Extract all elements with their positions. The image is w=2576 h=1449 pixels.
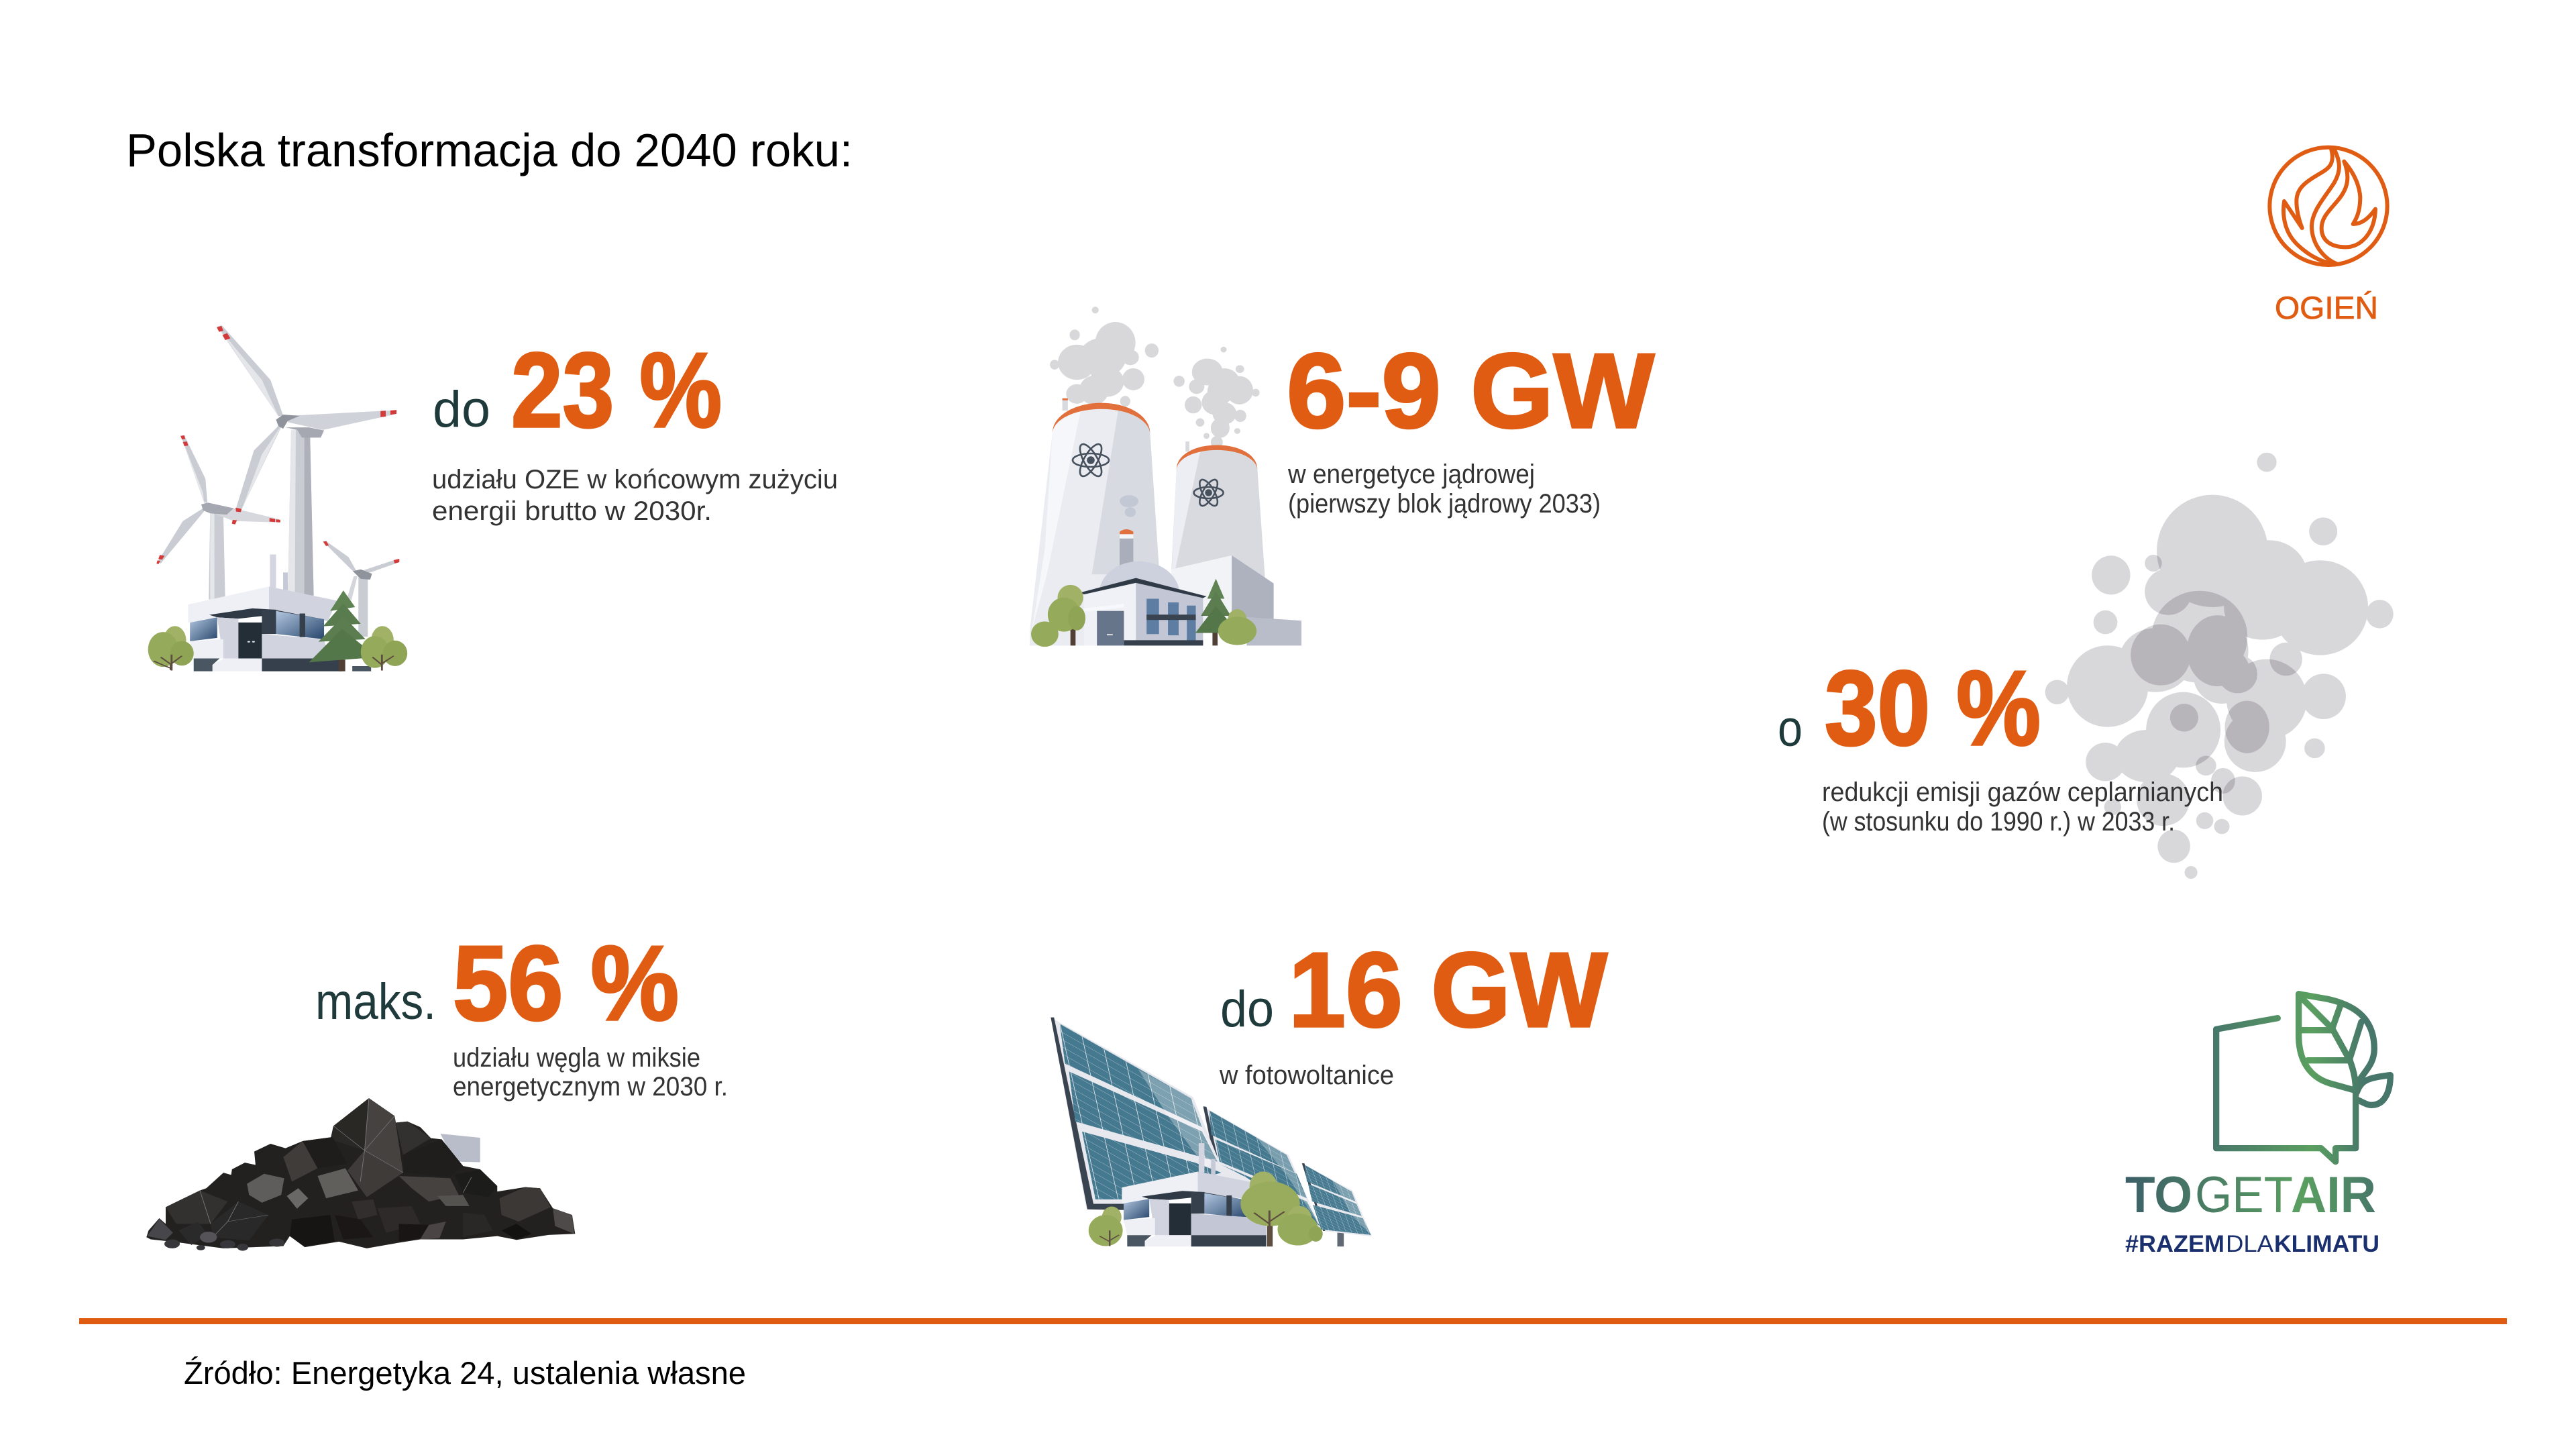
logo: TogetAir: AIR [2291,1167,2376,1224]
logo: TogetAir: DLA [2226,1231,2274,1257]
stat: 30% emissions: (w stosunku do 1990 r.) w 2033 r. [1822,807,2175,837]
solar building [1122,1143,1267,1246]
right bush [352,626,407,672]
stat: 30% emissions: o [1778,700,1803,757]
stat: 6-9 GW: (pierwszy blok jądrowy 2033) [1288,489,1601,519]
dome [1098,561,1181,599]
left turbine [156,435,280,599]
stat: 56% coal: udziału węgla w miksie [453,1043,700,1073]
lower cloud layer [2045,555,2346,879]
logo: TogetAir [2125,994,2390,1257]
stat: 56% coal: 56 % [453,924,679,1042]
stat: 23% OZE [432,331,838,526]
right cooling tower [1171,441,1265,579]
pine tree [309,590,377,672]
left cooling tower [1030,398,1159,645]
logo: TogetAir: KLIMATU [2274,1231,2379,1257]
icon: wind turbines with building [148,325,407,672]
stat: 16 GW: do [1220,981,1274,1038]
stat: 23% OZE: 23 % [511,331,722,449]
small chimney [1120,529,1133,566]
stat: 30% emissions: 30 % [1825,649,2041,767]
icon: fire element [2269,148,2387,325]
stat: 23% OZE: udziału OZE w końcowym zużyciu [432,465,838,494]
stat: 23% OZE: energii brutto w 2030r. [432,496,712,526]
stat: 16 GW: w fotowoltanice [1219,1061,1394,1090]
large turbine [217,325,396,596]
factory building [188,555,342,672]
large solar panel [1051,1018,1226,1210]
icon: solar farm with building [1051,1018,1372,1246]
upper cloud layer [2092,453,2394,794]
logo: TogetAir: #RAZEM [2125,1231,2224,1257]
plant building [1080,578,1206,645]
stat: 56% coal: energetycznym w 2030 r. [453,1072,728,1102]
stat: 16 GW: 16 GW [1289,931,1607,1049]
trees [1031,579,1256,647]
stat: 56% coal [315,924,728,1102]
solar trees [1089,1171,1323,1246]
icon: coal pile [146,1098,575,1250]
source note: Źródło: Energetyka 24, ustalenia własne [184,1355,746,1391]
logo: TogetAir: GET [2195,1167,2293,1224]
medium solar panel [1203,1106,1321,1229]
small solar panel [1302,1163,1372,1246]
smoke plumes [1050,307,1260,448]
stat: 23% OZE: do [433,381,490,438]
icon: nuclear power plant [1030,307,1301,647]
stat: 56% coal: maks. [315,973,436,1030]
icon: greenhouse gas cloud [2045,453,2394,879]
stat: 30% emissions: redukcji emisji gazów ceplarnianych [1822,777,2223,807]
stat: 6-9 GW: w energetyce jądrowej [1287,460,1535,489]
stat: 6-9 GW [1287,332,1654,519]
small turbine [323,541,399,637]
loose coal pieces [164,1232,284,1250]
rear blocks [1171,555,1301,645]
left bush [148,626,194,671]
icon: fire element: OGIEŃ [2275,290,2378,325]
coal facets [148,1098,574,1246]
stat: 30% emissions [1778,649,2223,837]
logo: TogetAir: TO [2125,1167,2192,1224]
stat: 16 GW [1219,931,1607,1090]
atom symbols [1073,441,1224,508]
title: Polska transformacja do 2040 roku: [126,124,853,176]
stat: 6-9 GW: 6-9 GW [1287,332,1654,450]
